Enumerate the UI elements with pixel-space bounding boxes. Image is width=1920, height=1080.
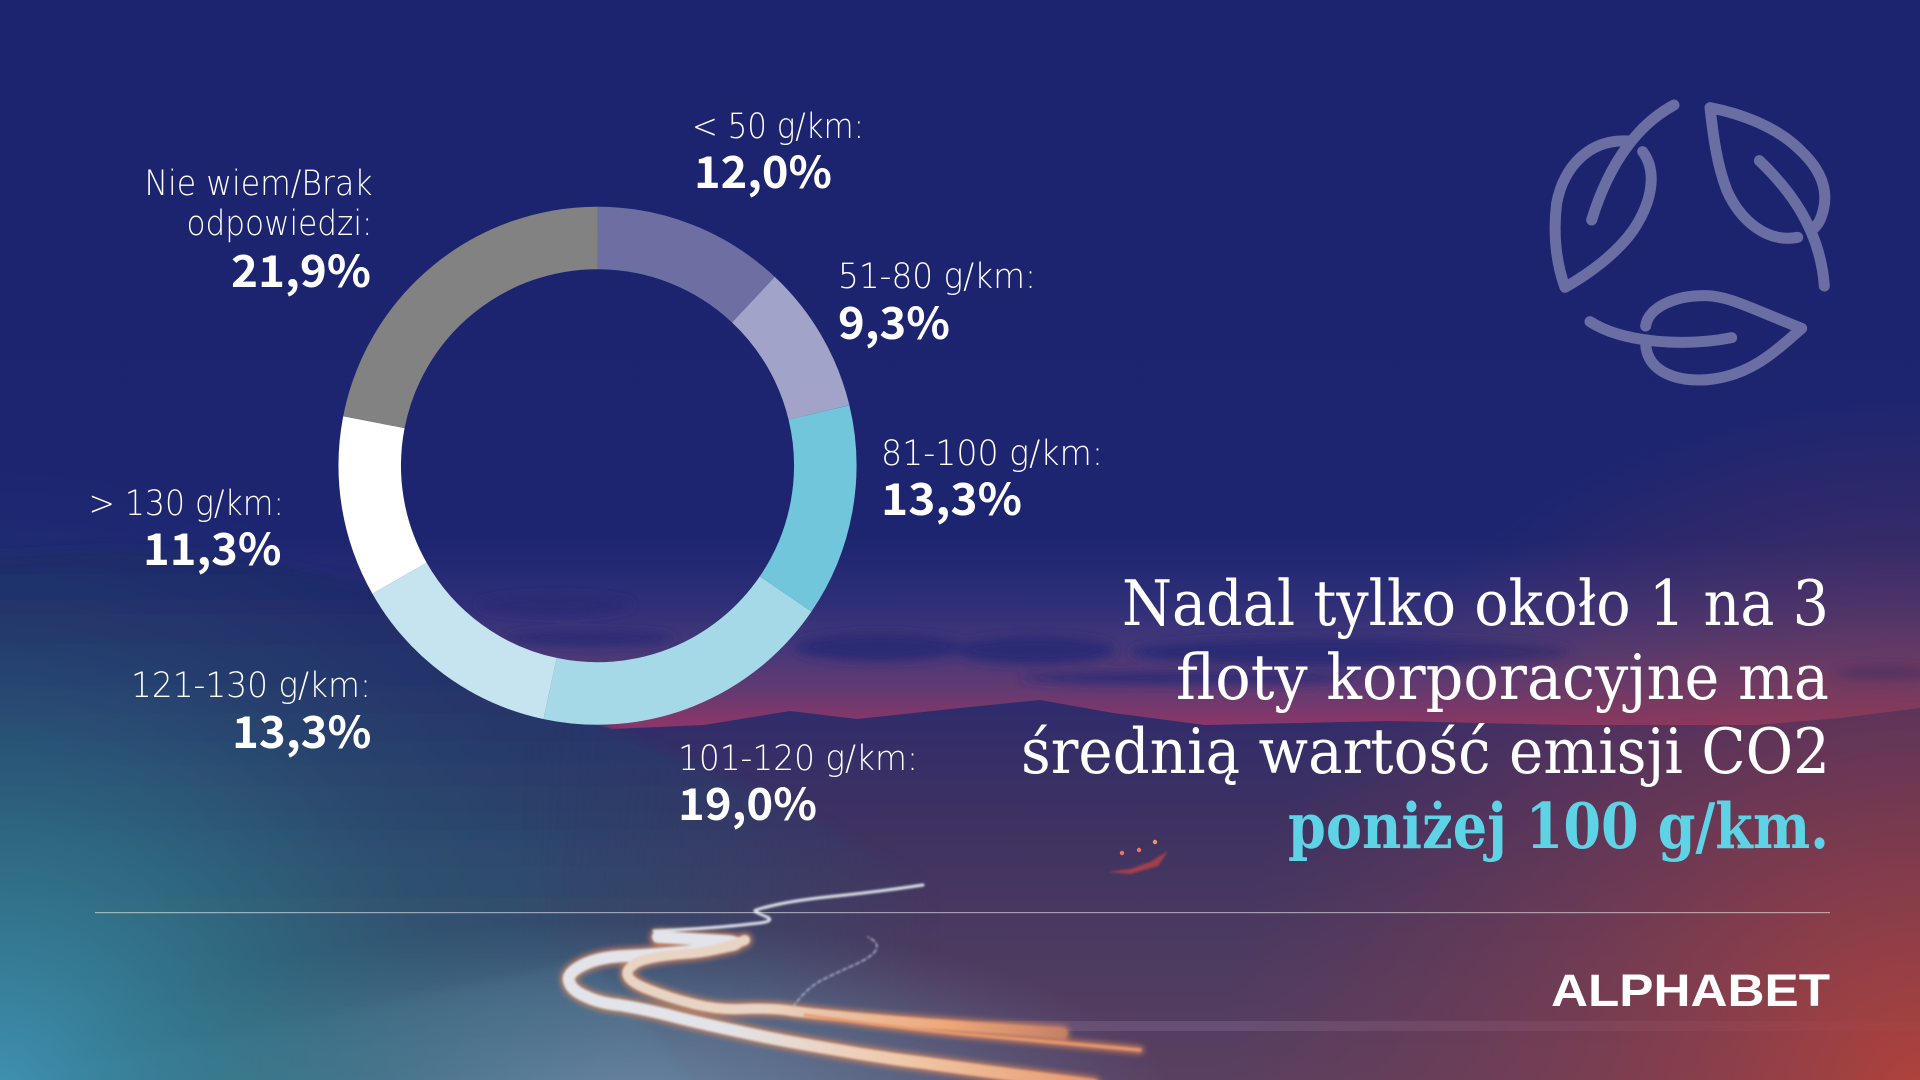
headline highlight: poniżej 100 g/km. [1288, 789, 1829, 863]
label: over 130 g/km 11,3% [88, 484, 284, 578]
label: no answer 21,9%: Nie wiem/Brak [144, 164, 372, 204]
label: 101-120 g/km 19,0%: 19,0% [678, 769, 817, 833]
label: no answer 21,9% [144, 164, 372, 300]
headline: Nadal tylko około 1 na 3 [1122, 567, 1829, 640]
left mountain [0, 552, 813, 1080]
segment: no answer [374, 238, 598, 422]
light trails core [569, 885, 1140, 1080]
distant red lights [1108, 840, 1168, 874]
label: 101-120 g/km 19,0%: 101-120 g/km: [678, 739, 918, 779]
label: 81-100 g/km 13,3%: 13,3% [881, 464, 1022, 528]
label: 121-130 g/km 13,3%: 121-130 g/km: [131, 666, 371, 706]
background: dusk mountain road photo [0, 437, 1920, 1080]
icon: three leaves recycling [1555, 105, 1825, 380]
label: under 50 g/km 12,0%: < 50 g/km: [692, 107, 864, 147]
light trails glow [569, 937, 1140, 1080]
headline: średnią wartość emisji CO2 [1021, 715, 1830, 788]
segment: 81-100 g/km [786, 412, 825, 594]
label: 51-80 g/km 9,3%: 51-80 g/km: [838, 257, 1036, 297]
segment: 51-80 g/km [753, 300, 819, 412]
headline [1021, 567, 1830, 863]
divider [95, 912, 1830, 913]
far hills [0, 640, 1920, 1080]
chart: donut of CO2 emission bands [370, 238, 825, 693]
label: over 130 g/km 11,3%: > 130 g/km: [88, 484, 284, 524]
label: 121-130 g/km 13,3%: 13,3% [232, 697, 372, 761]
label: 51-80 g/km 9,3%: 9,3% [838, 288, 950, 352]
label: no answer 21,9%: 21,9% [231, 236, 371, 300]
headline: floty korporacyjne ma [1176, 641, 1829, 714]
segment: 121-130 g/km [400, 578, 550, 688]
label: 101-120 g/km 19,0% [678, 739, 918, 833]
label: no answer 21,9%: odpowiedzi: [186, 204, 372, 244]
clouds [477, 595, 1920, 684]
label: 81-100 g/km 13,3% [881, 434, 1103, 528]
label: under 50 g/km 12,0% [692, 107, 864, 201]
label: under 50 g/km 12,0%: 12,0% [694, 137, 832, 201]
label: 121-130 g/km 13,3% [131, 666, 372, 761]
logo: ALPHABET: ALPHABET [1551, 965, 1830, 1016]
label: 81-100 g/km 13,3%: 81-100 g/km: [881, 434, 1103, 474]
segment: 101-120 g/km [550, 594, 786, 693]
road surface [0, 860, 1920, 1080]
label: over 130 g/km 11,3%: 11,3% [143, 514, 282, 578]
label: 51-80 g/km 9,3% [838, 257, 1036, 352]
segment: over 130 g/km [370, 422, 400, 578]
guard rail [980, 1021, 1920, 1031]
segment: under 50 g/km [598, 238, 753, 300]
